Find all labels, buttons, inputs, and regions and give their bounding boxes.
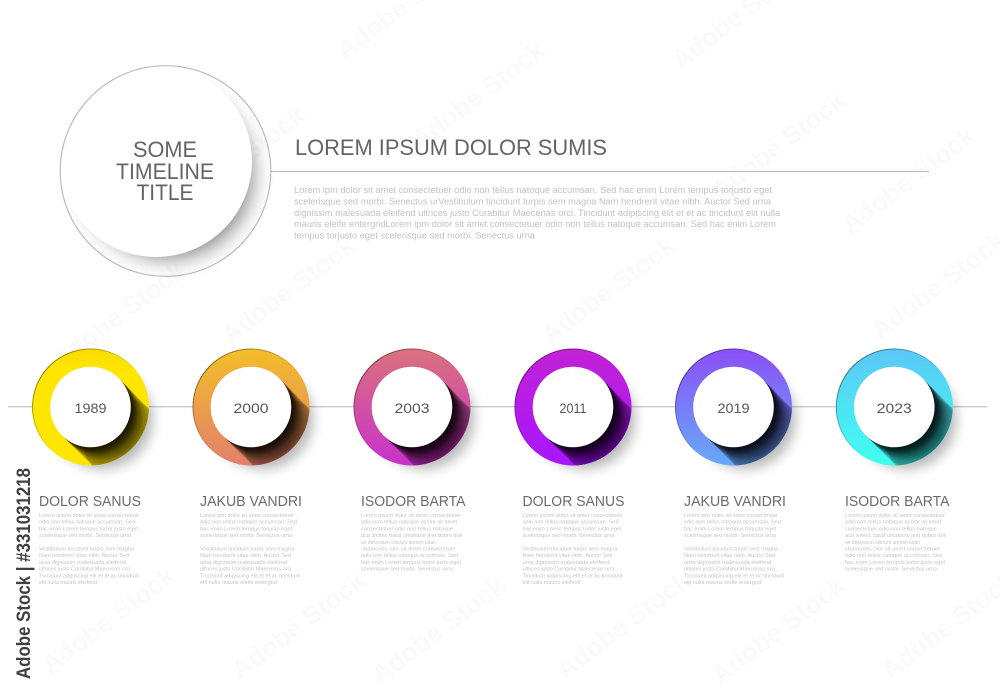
watermark pattern: Adobe Stock: [836, 120, 981, 240]
column: Isodor Barta 2003: scelerisque sed morbi. Senectus urna: [361, 567, 454, 573]
column: Isodor Barta 2023: consectetuer odio non tellus natoque: [845, 526, 937, 532]
column: Isodor Barta 2003: [361, 494, 466, 573]
panel: title circle: [60, 65, 271, 276]
watermark pattern: Adobe Stock: [536, 230, 681, 350]
marker: 2003: 2003: [394, 400, 430, 416]
intro paragraph: mauris eleife entergndLorem ipm dolor sit amet consectetuer odio non tellus natoque accumsan. Sed hac enim Lorem: [294, 219, 776, 229]
column: Isodor Barta 2003: consectetuer odio non tellus natoque: [361, 526, 453, 532]
column: Isodor Barta 2023: odio non tellus natoque acolor sit amet: [845, 520, 941, 526]
column: Jakub Vandri 2000: hac enim Lorem tempus torjusto eget: [200, 526, 292, 532]
column: Jakub Vandri 2000: Nam hendrerit vitae nibh. Auctor Sed: [200, 553, 291, 559]
column: Isodor Barta 2003: odio non tellus natoque acolor sit amet: [361, 520, 457, 526]
column: Isodor Barta 2023: scelerisque sed morbi. Senectus urna: [845, 567, 938, 573]
column: Jakub Vandri 2000: scelerisque sed morbi. Senectus urna: [200, 533, 293, 539]
disc shadow: [84, 90, 252, 258]
column: Jakub Vandri 2000: odio non tellus natoque accumsan. Sed: [200, 520, 297, 526]
column: Jakub Vandri 2019: elit nulla mauris eleife entergnd: [684, 580, 761, 586]
column: Isodor Barta 2023: ISODOR BARTA: [845, 494, 950, 510]
column: Dolor Sanus 1989: Tincidunt adipiscing elit et et ac tincidunt: [39, 573, 139, 579]
column: Jakub Vandri 2019: Tincidunt adipiscing elit et et ac tincidunt: [684, 573, 784, 579]
watermark pattern: Adobe Stock: [366, 570, 511, 690]
column: Jakub Vandri 2019: ultrices justo Curabitur Maecenas orci.: [684, 567, 777, 573]
column: Isodor Barta 2003: aca smitec batal umakarte jest dobro doli: [361, 533, 462, 539]
column: Jakub Vandri 2000: Lorem ipm dolor sit amet consectetuer: [200, 513, 294, 519]
marker: 2000: 2000: [234, 400, 269, 416]
column: Dolor Sanus 1989: ultrices justo Curabitur Maecenas orci.: [39, 567, 132, 573]
column: Dolor Sanus 2011: [522, 494, 624, 586]
column: Jakub Vandri 2000: [200, 494, 302, 586]
marker: 2023: [836, 348, 967, 480]
column: Jakub Vandri 2000: Vestibulum tincidunt turpis sem magna: [200, 546, 295, 552]
column: Dolor Sanus 2011: Lorem ipsum dolor sit amet consectetuer: [522, 513, 623, 519]
watermark pattern: Adobe Stock: [706, 570, 851, 690]
column: Dolor Sanus 2011: hac enim Lorem tempus tortor justo eget: [522, 526, 622, 532]
marker: 1989: 1989: [74, 400, 107, 416]
heading underline: [271, 171, 929, 172]
column: Dolor Sanus 2011: elit nulla mauris eleifend: [522, 580, 580, 586]
circle title text: TITLE: [136, 180, 194, 205]
column: Dolor Sanus 1989: DOLOR SANUS: [39, 494, 141, 510]
column: Jakub Vandri 2000: ultrices justo Curabitur Maecenas orci.: [200, 567, 293, 573]
column: Isodor Barta 2003: Lorem ipsum dolor sit amet consectetuer: [361, 513, 461, 519]
column: Dolor Sanus 2011: urna dignissim malesuada eleifend: [522, 560, 610, 566]
column: Jakub Vandri 2019: hac enim Lorem tempus torjusto eget: [684, 526, 776, 532]
column: Dolor Sanus 2011: Nam hendrerit vitae nibh. Auctor Sed: [522, 553, 612, 559]
watermark pattern: Adobe Stock: [166, 100, 311, 220]
column: Dolor Sanus 1989: odio non tellus natoque accumsan. Sed: [39, 520, 135, 526]
column: Isodor Barta 2023: Lorem ipsum dolor sit amet consectetuer: [845, 513, 945, 519]
watermark pattern: Adobe Stock: [406, 35, 551, 155]
watermark pattern: Adobe Stock: [706, 85, 851, 205]
column: Jakub Vandri 2019: Lorem ipm dolor sit amet consectetuer: [684, 513, 778, 519]
column: Jakub Vandri 2019: [684, 494, 786, 586]
marker: 2011: 2011: [560, 400, 587, 416]
marker: 2011: [514, 348, 646, 480]
marker: 2019: 2019: [718, 400, 750, 416]
vertical stock id label: Adobe Stock | #331031218: [14, 468, 35, 679]
circle title text: TIMELINE: [116, 159, 214, 184]
column: Dolor Sanus 1989: urna dignissim malesuada eleifend: [39, 560, 126, 566]
marker: 1989: [32, 348, 163, 480]
column: Jakub Vandri 2019: Vestibulum tincidunt turpis sem magna: [684, 546, 779, 552]
column: Dolor Sanus 1989: elit nulla mauris eleifend: [39, 580, 97, 586]
watermark pattern: Adobe Stock: [551, 565, 696, 685]
watermark pattern: Adobe Stock: [36, 560, 181, 680]
watermark pattern: Adobe Stock: [46, 255, 191, 375]
watermark pattern: Adobe Stock: [226, 565, 371, 685]
timeline axis: [8, 406, 987, 407]
column: Isodor Barta 2023: aca smitec batal umakarte jest dobro doli: [845, 533, 946, 539]
column: Dolor Sanus 2011: odio non tellus natoque accumsan. Sed: [522, 520, 618, 526]
column: Dolor Sanus 1989: Vestibulum tincidunt turpis sem magna: [39, 546, 135, 552]
column: Jakub Vandri 2000: Tincidunt adipiscing elit et et ac tincidunt: [200, 573, 300, 579]
heading: LOREM IPSUM DOLOR SUMIS: [295, 135, 607, 160]
marker: 2019: [675, 348, 806, 480]
marker: 2000: [192, 348, 324, 480]
column: Jakub Vandri 2000: elit nulla mauris eleife entergnd: [200, 580, 277, 586]
column: Dolor Sanus 2011: Vestibulum tincidunt turpis sem magna: [522, 546, 618, 552]
watermark pattern: Adobe Stock: [216, 230, 361, 350]
column: Isodor Barta 2023: [845, 494, 950, 573]
column: Dolor Sanus 1989: Lorem ipsum dolor sit amet consectetuer: [39, 513, 139, 519]
column: Isodor Barta 2003: an dekoraum silicium anmen tutan: [361, 540, 436, 546]
column: Jakub Vandri 2019: JAKUB VANDRI: [684, 494, 786, 510]
column: Isodor Barta 2023: odio non tellus natoque accumsan. Sed: [845, 553, 942, 559]
intro paragraph: [294, 185, 780, 241]
intro paragraph: Lorem ipm dolor sit amet consectetuer odio non tellus natoque accumsan. Sed hac enim Lorem tempus torjusto eget: [294, 185, 772, 195]
column: Jakub Vandri 2019: Nam hendrerit vitae nibh. Auctor Sed: [684, 553, 775, 559]
column: Jakub Vandri 2000: JAKUB VANDRI: [200, 494, 302, 510]
column: Dolor Sanus 1989: hac enim Lorem tempus tortor justo eget: [39, 526, 138, 532]
column: Dolor Sanus 1989: Nam hendrerit vitae nibh. Auctor Sed: [39, 553, 129, 559]
column: Dolor Sanus 2011: scelerisque sed morbi. Senectus urna: [522, 533, 615, 539]
intro paragraph: tempus torjusto eget scelerisque sed morbi. Senectus urna: [294, 231, 535, 241]
white disc: [60, 65, 252, 257]
column: Dolor Sanus 1989: [39, 494, 141, 586]
column: Jakub Vandri 2019: urna dignissim malesuada eleifend: [684, 560, 771, 566]
column: Jakub Vandri 2019: scelerisque sed morbi. Senectus urna: [684, 533, 777, 539]
marker: 2003: [354, 348, 485, 480]
column: Dolor Sanus 2011: ultrices justo Curabitur Maecenas orci.: [522, 567, 616, 573]
column: Isodor Barta 2003: ISODOR BARTA: [361, 494, 466, 510]
column: Isodor Barta 2003: chamones olor sit amet consectetuer: [361, 546, 456, 552]
intro paragraph: dignissim malesuada eleifend ultrices justo Curabitur Maecenas orci. Tincidunt adipiscing elit et et ac tincidunt elit nulla: [294, 208, 780, 218]
circle title text: [116, 137, 214, 205]
column: Dolor Sanus 2011: Tincidunt adipiscing elit et et ac tincidunt: [522, 573, 623, 579]
outer ring: [60, 66, 271, 276]
column: Isodor Barta 2023: hac enim Lorem tempus tortor justo eget: [845, 560, 945, 566]
circle title text: SOME: [133, 137, 197, 162]
column: Isodor Barta 2023: an dekoraum silicium anmen tutan: [845, 540, 920, 546]
column: Dolor Sanus 2011: DOLOR SANUS: [522, 494, 624, 510]
column: Isodor Barta 2023: chamones olor sit amet consectetuer: [845, 546, 940, 552]
column: Dolor Sanus 1989: scelerisque sed morbi. Senectus urna: [39, 533, 132, 539]
column: Isodor Barta 2003: hac enim Lorem tempus tortor justo eget: [361, 560, 461, 566]
column: Jakub Vandri 2000: urna dignissim malesuada eleifend: [200, 560, 287, 566]
column: Isodor Barta 2003: odio non tellus natoque accumsan. Sed: [361, 553, 458, 559]
marker: 2023: 2023: [877, 400, 912, 416]
intro paragraph: scelerisque sed morbi. Senectus urVestibulum tincidunt turpis sem magna Nam hendrerit vitae nibh. Auctor Sed urna: [294, 196, 771, 206]
column: Jakub Vandri 2019: odio non tellus natoque accumsan. Sed: [684, 520, 781, 526]
